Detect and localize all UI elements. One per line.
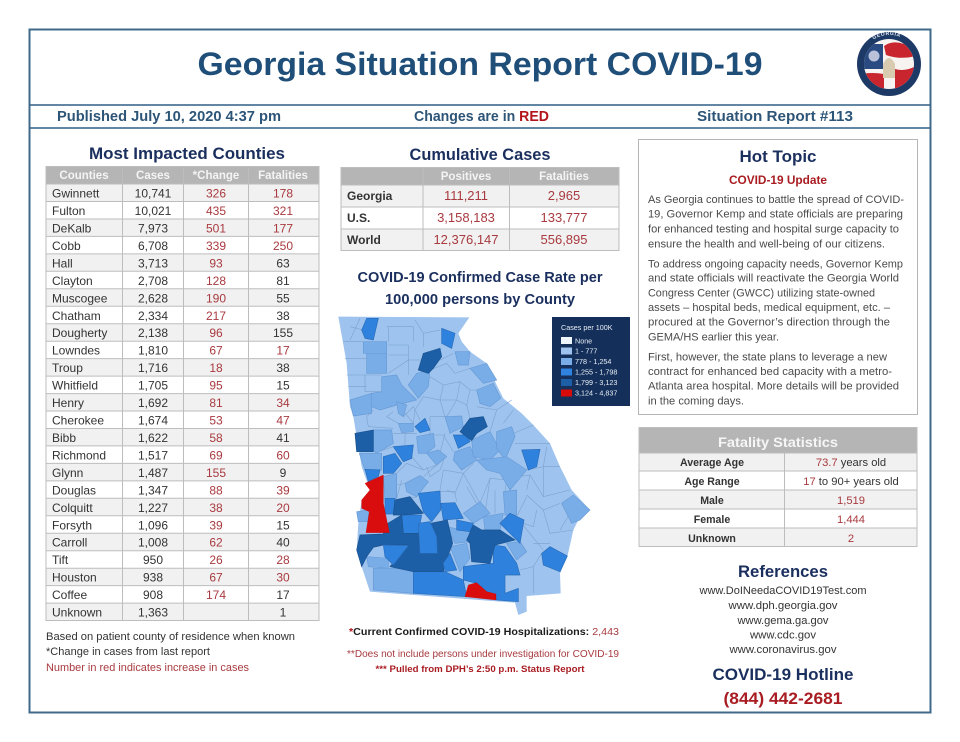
table: most impacted counties: 17 (276, 344, 290, 358)
map legend: 1 - 777 (575, 346, 597, 356)
table: most impacted counties: 41 (276, 431, 290, 445)
published date: Published July 10, 2020 4:37 pm (57, 109, 281, 125)
table: most impacted counties: 20 (276, 501, 290, 515)
table: most impacted counties: 1,705 (138, 379, 168, 393)
table: most impacted counties: 128 (206, 274, 226, 288)
table: most impacted counties: Cobb (52, 239, 81, 253)
table: most impacted counties: Cases (136, 170, 170, 182)
table: most impacted counties: Clayton (52, 274, 93, 288)
table: most impacted counties: 55 (276, 291, 290, 305)
table: most impacted counties: 6,708 (138, 239, 168, 253)
table: most impacted counties: 155 (206, 466, 226, 480)
table: cumulative cases: 556,895 (540, 232, 588, 247)
table: most impacted counties: Chatham (52, 309, 101, 323)
table: most impacted counties: 1 (280, 606, 287, 620)
table: most impacted counties: 58 (209, 431, 223, 445)
map heading: COVID-19 Confirmed Case Rate per (358, 270, 603, 286)
table: most impacted counties: 28 (276, 553, 290, 567)
table: cumulative cases: 2,965 (548, 188, 580, 203)
map footnotes: **Does not include persons under investigation for COVID-19 (347, 649, 619, 660)
table: cumulative cases: 12,376,147 (433, 232, 499, 247)
reference links: www.coronavirus.gov (728, 644, 837, 656)
map legend: 778 - 1,254 (575, 357, 611, 366)
table: cumulative cases: U.S. (347, 211, 370, 225)
hot topic body text: First, however, the state plans to leverage a new (648, 351, 887, 363)
heading: cumulative cases: Cumulative Cases (410, 145, 550, 164)
table: fatality statistics: Unknown (688, 533, 736, 545)
hot topic body text: and state officials will reactivate the Georgia World (648, 273, 899, 285)
table: most impacted counties: 2,628 (138, 291, 168, 305)
table: most impacted counties: 1,096 (138, 518, 168, 532)
table: fatality statistics: Fatality Statistics (718, 434, 838, 450)
table: most impacted counties: 1,517 (138, 448, 168, 462)
table: most impacted counties: 339 (206, 239, 226, 253)
table: most impacted counties: 60 (276, 448, 290, 462)
heading: most impacted counties: Most Impacted Counties (89, 144, 285, 163)
table: most impacted counties: 174 (206, 588, 226, 602)
table: most impacted counties: 39 (276, 483, 290, 497)
table: most impacted counties: 67 (209, 344, 223, 358)
hotline heading: COVID-19 Hotline (712, 665, 854, 684)
map legend (552, 317, 630, 406)
table: cumulative cases: Georgia (347, 189, 393, 203)
table: most impacted counties: Counties (59, 170, 109, 182)
map footnotes (347, 649, 619, 675)
table: most impacted counties: 2,138 (138, 326, 168, 340)
hot topic body text: GEMA/HS earlier this year. (648, 332, 779, 344)
table: most impacted counties: Carroll (52, 536, 87, 550)
table: most impacted counties: Lowndes (52, 344, 100, 358)
icon: state emergency seal (857, 32, 921, 96)
table: most impacted counties: 2,334 (138, 309, 168, 323)
table: most impacted counties: Glynn (52, 466, 83, 480)
table: most impacted counties (46, 166, 319, 621)
table: most impacted counties: 155 (273, 326, 293, 340)
hot topic heading: Hot Topic (740, 147, 816, 166)
map legend: 1,255 - 1,798 (575, 368, 617, 376)
map heading: 100,000 persons by County (385, 292, 575, 308)
table: most impacted counties: Hall (52, 256, 73, 270)
table: most impacted counties: 34 (276, 396, 290, 410)
table: most impacted counties: Fulton (52, 204, 85, 218)
table: most impacted counties: 10,021 (135, 204, 172, 218)
hot topic subheading: COVID-19 Update (729, 175, 827, 187)
table: most impacted counties: Gwinnett (52, 186, 100, 200)
table: most impacted counties: *Change (193, 170, 239, 182)
table: most impacted counties: 88 (209, 483, 223, 497)
table: most impacted counties: 1,810 (138, 344, 168, 358)
table: most impacted counties: 38 (276, 361, 290, 375)
table: most impacted counties: Coffee (52, 588, 87, 602)
table: most impacted counties: 93 (209, 256, 223, 270)
table: most impacted counties: Troup (52, 361, 83, 375)
table: most impacted counties: 177 (273, 222, 293, 236)
reference links: www.gema.ga.gov (736, 615, 829, 627)
table: most impacted counties: Richmond (52, 448, 106, 462)
table: most impacted counties: DeKalb (52, 222, 92, 236)
table: most impacted counties: 178 (273, 186, 293, 200)
map footnotes: *** Pulled from DPH’s 2:50 p.m. Status Report (376, 664, 585, 675)
hospitalizations line: *Current Confirmed COVID-19 Hospitalizations: 2,443 (349, 626, 619, 638)
table: fatality statistics: 17 to 90+ years old (803, 476, 899, 488)
reference links: www.DoINeedaCOVID19Test.com (698, 585, 866, 597)
table: most impacted counties: 9 (280, 466, 287, 480)
reference links: www.cdc.gov (749, 630, 817, 642)
table: cumulative cases: Positives (441, 171, 491, 183)
map legend: 3,124 - 4,837 (575, 388, 617, 398)
hot topic body text: Atlanta area hospital. More details will be provided (648, 381, 899, 393)
table: most impacted counties: 190 (206, 291, 226, 305)
table: most impacted counties: 47 (276, 414, 290, 428)
heading: references: References (738, 562, 828, 581)
table: most impacted counties: 1,347 (138, 483, 168, 497)
table: fatality statistics: 2 (848, 533, 854, 545)
table: most impacted counties: 217 (206, 309, 226, 323)
table: most impacted counties: 1,622 (138, 431, 168, 445)
table: fatality statistics: 1,444 (837, 514, 865, 526)
table: most impacted counties: Henry (52, 396, 84, 410)
table: most impacted counties: 1,692 (138, 396, 168, 410)
table: fatality statistics: Female (694, 514, 730, 526)
table: most impacted counties: Muscogee (52, 291, 108, 305)
table: most impacted counties: Colquitt (52, 501, 93, 515)
map heading (358, 270, 603, 308)
table: most impacted counties: 81 (276, 274, 290, 288)
table: fatality statistics: Average Age (680, 457, 744, 469)
hot topic body text (648, 194, 904, 408)
table footnotes: *Change in cases from last report (46, 646, 210, 658)
table: most impacted counties: 1,716 (138, 361, 168, 375)
table: most impacted counties: 938 (143, 571, 163, 585)
panel: hot topic (638, 140, 918, 414)
table: most impacted counties: Forsyth (52, 518, 92, 532)
table: fatality statistics: Male (700, 495, 724, 507)
map legend: 1,799 - 3,123 (575, 378, 617, 387)
table: most impacted counties: Whitfield (52, 379, 98, 393)
map legend: Cases per 100K (561, 323, 613, 332)
table: most impacted counties: 26 (209, 553, 223, 567)
icon: state emergency seal: GEORGIA (872, 32, 900, 39)
table: cumulative cases: World (347, 233, 381, 247)
table: most impacted counties: 67 (209, 571, 223, 585)
table: most impacted counties: Cherokee (52, 414, 104, 428)
table: cumulative cases: Fatalities (539, 171, 589, 183)
table: fatality statistics: Age Range (684, 476, 740, 488)
report number: Situation Report #113 (697, 109, 853, 125)
hot topic body text: As Georgia continues to battle the spread of COVID- (648, 194, 904, 206)
table: most impacted counties: 501 (206, 222, 226, 236)
header band lines (30, 105, 930, 128)
table: fatality statistics: 73.7 years old (816, 457, 886, 469)
table: most impacted counties: 1,227 (138, 501, 168, 515)
table footnotes: Number in red indicates increase in cases (46, 662, 249, 674)
table: cumulative cases: 3,158,183 (437, 210, 495, 225)
table: most impacted counties: 10,741 (135, 186, 172, 200)
table: most impacted counties: 1,363 (138, 606, 168, 620)
hot topic body text: contract for enhanced bed capacity with a metro- (648, 366, 892, 378)
table: most impacted counties: 3,713 (138, 256, 168, 270)
table: most impacted counties: 81 (209, 396, 223, 410)
table: most impacted counties: 38 (276, 309, 290, 323)
table: most impacted counties: 62 (209, 536, 223, 550)
table: most impacted counties: 17 (276, 588, 290, 602)
table: cumulative cases: 111,211 (444, 188, 488, 203)
table: most impacted counties: 95 (209, 379, 223, 393)
table: most impacted counties: 435 (206, 204, 226, 218)
table: most impacted counties: Tift (52, 553, 69, 567)
reference links: www.dph.georgia.gov (727, 600, 838, 612)
table: fatality statistics (639, 427, 917, 547)
table: most impacted counties: 7,973 (138, 222, 168, 236)
table: most impacted counties: 63 (276, 256, 290, 270)
table: most impacted counties: Fatalities (258, 170, 308, 182)
table: most impacted counties: 39 (209, 518, 223, 532)
table: most impacted counties: 69 (209, 448, 223, 462)
hot topic body text: procured at the Governor’s direction through the (648, 317, 890, 329)
changes note: Changes are in RED (414, 109, 549, 125)
table: most impacted counties: 53 (209, 414, 223, 428)
hot topic body text: in the coming days. (648, 396, 744, 408)
title: Georgia Situation Report COVID-19 (198, 46, 762, 82)
table footnotes: Based on patient county of residence when known (46, 631, 295, 643)
table: most impacted counties: 1,008 (138, 536, 168, 550)
table: fatality statistics: 1,519 (837, 495, 865, 507)
table: most impacted counties: 321 (273, 204, 293, 218)
table: most impacted counties: 38 (209, 501, 223, 515)
hotline number: (844) 442-2681 (724, 689, 842, 708)
table: most impacted counties: 40 (276, 536, 290, 550)
table: most impacted counties: 18 (209, 361, 223, 375)
table footnotes (46, 631, 295, 674)
table: most impacted counties: 950 (143, 553, 163, 567)
table: most impacted counties: 1,674 (138, 414, 168, 428)
hot topic body text: Congress Center (GWCC) utilizing state-owned (648, 287, 875, 299)
table: most impacted counties: Dougherty (52, 326, 107, 340)
table: most impacted counties: 15 (276, 379, 290, 393)
choropleth map of Georgia counties (338, 317, 590, 615)
table: most impacted counties: Houston (52, 571, 97, 585)
table: most impacted counties: 2,708 (138, 274, 168, 288)
table: most impacted counties: 908 (143, 588, 163, 602)
table: most impacted counties: 326 (206, 186, 226, 200)
map legend: None (575, 336, 592, 346)
table: most impacted counties: Douglas (52, 483, 96, 497)
table: most impacted counties: Unknown (52, 606, 102, 620)
table: most impacted counties: Bibb (52, 431, 76, 445)
table: cumulative cases: 133,777 (540, 210, 588, 225)
table: most impacted counties: 96 (209, 326, 223, 340)
table: cumulative cases (341, 167, 619, 251)
table: most impacted counties: 250 (273, 239, 293, 253)
table: most impacted counties: 30 (276, 571, 290, 585)
table: most impacted counties: 1,487 (138, 466, 168, 480)
hot topic body text: ensure the health and well-being of our citizens. (648, 238, 885, 250)
hot topic body text: 19, Governor Kemp and state officials are preparing (648, 209, 903, 221)
hot topic body text: assets – hospital beds, medical equipment, etc. – (648, 302, 890, 314)
hot topic body text: To address ongoing capacity needs, Governor Kemp (648, 258, 903, 270)
hot topic body text: for enhanced testing and hospital surge capacity to (648, 223, 899, 235)
reference links (698, 585, 866, 656)
table: most impacted counties: 15 (276, 518, 290, 532)
